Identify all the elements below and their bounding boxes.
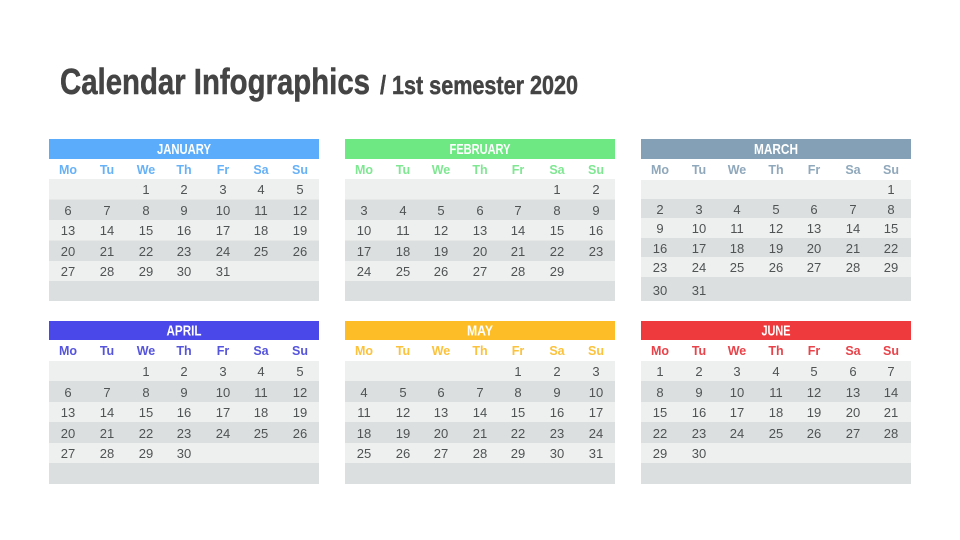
panel: January calendar [49, 139, 319, 301]
date rows: January: 26 [293, 244, 307, 259]
date rows: May: 19 [396, 426, 410, 441]
date rows: April: 9 [180, 385, 188, 400]
date rows: June [641, 361, 911, 484]
date rows: May: 7 [476, 385, 484, 400]
date rows: March: 30 [653, 283, 667, 298]
date rows: June: 25 [769, 426, 783, 441]
date rows: February: 2 [592, 182, 600, 197]
weekday labels: April: We [137, 344, 155, 358]
date rows: March: 29 [884, 260, 898, 275]
month header: March [641, 139, 911, 159]
weekday labels: January: We [137, 163, 155, 177]
weekday labels: March: Sa [845, 163, 862, 177]
date rows: February: 8 [553, 203, 561, 218]
weekday labels: March: Mo [651, 163, 669, 177]
weekday labels: January: Fr [217, 163, 229, 177]
date rows: June: 9 [695, 385, 703, 400]
date rows: March: 7 [849, 202, 857, 217]
weekday labels: April: Tu [100, 344, 114, 358]
date rows: January: 31 [216, 264, 230, 279]
date rows: January: 30 [177, 264, 191, 279]
date rows: February: 21 [511, 244, 525, 259]
date rows: January: 9 [180, 203, 188, 218]
weekday labels: June: Su [883, 344, 899, 358]
month header: May [345, 321, 615, 340]
date rows: March: 8 [887, 202, 895, 217]
date rows: April: 10 [216, 385, 230, 400]
date rows: March: 26 [769, 260, 783, 275]
date rows: January: 8 [142, 203, 150, 218]
date rows: January: 16 [177, 223, 191, 238]
weekday labels: April: Th [176, 344, 192, 358]
date rows: February: 20 [473, 244, 487, 259]
date rows: January: 6 [64, 203, 72, 218]
date rows: February: 3 [360, 203, 368, 218]
date rows: April: 28 [100, 446, 114, 461]
date rows: May: 23 [550, 426, 564, 441]
date rows: June: 23 [692, 426, 706, 441]
date rows: March: 6 [810, 202, 818, 217]
date rows: May: 12 [396, 405, 410, 420]
date rows: March: 10 [692, 221, 706, 236]
date rows: May: 5 [399, 385, 407, 400]
date rows: January: 21 [100, 244, 114, 259]
date rows: April: 26 [293, 426, 307, 441]
date rows: April: 29 [139, 446, 153, 461]
date rows: May: 20 [434, 426, 448, 441]
date rows: June: 14 [884, 385, 898, 400]
date rows: January: 10 [216, 203, 230, 218]
date rows: June: 30 [692, 446, 706, 461]
date rows: February: 13 [473, 223, 487, 238]
date rows: March: 21 [846, 241, 860, 256]
date rows: June: 11 [769, 385, 783, 400]
date rows: January: 20 [61, 244, 75, 259]
date rows: February: 17 [357, 244, 371, 259]
weekday labels: January: Mo [59, 163, 77, 177]
date rows: January: 11 [254, 203, 268, 218]
panel: March calendar [641, 139, 911, 301]
date rows: January: 12 [293, 203, 307, 218]
date rows: June: 28 [884, 426, 898, 441]
date rows: June: 10 [730, 385, 744, 400]
date rows: April: 4 [257, 364, 265, 379]
weekday labels: January: Th [176, 163, 192, 177]
month header: April [49, 321, 319, 340]
date rows: January: 13 [61, 223, 75, 238]
date rows: April: 16 [177, 405, 191, 420]
weekday labels: May: We [432, 344, 450, 358]
weekday labels: April: Sa [253, 344, 270, 358]
date rows: May: 27 [434, 446, 448, 461]
date rows: February: 15 [550, 223, 564, 238]
weekday labels: May: Fr [512, 344, 524, 358]
date rows: February: 9 [592, 203, 600, 218]
weekday labels: March: Th [768, 163, 784, 177]
date rows: March: 5 [772, 202, 780, 217]
date rows: June: 21 [884, 405, 898, 420]
date rows: February: 11 [396, 223, 410, 238]
date rows: February: 7 [514, 203, 522, 218]
weekday labels: February: Tu [396, 163, 410, 177]
date rows: June: 18 [769, 405, 783, 420]
date rows: March: 22 [884, 241, 898, 256]
date rows: April: 6 [64, 385, 72, 400]
date rows: March: 1 [887, 182, 895, 197]
date rows: May: 1 [514, 364, 522, 379]
date rows: March: 9 [656, 221, 664, 236]
weekday labels: February [355, 163, 604, 177]
date rows: February: 26 [434, 264, 448, 279]
weekday labels: February: We [432, 163, 450, 177]
date rows: April: 17 [216, 405, 230, 420]
weekday labels: March: Tu [692, 163, 706, 177]
date rows: February: 6 [476, 203, 484, 218]
date rows: March: 15 [884, 221, 898, 236]
date rows: March: 12 [769, 221, 783, 236]
date rows: June: 6 [849, 364, 857, 379]
month header: January: JANUARY [157, 141, 211, 158]
date rows: June: 19 [807, 405, 821, 420]
date rows: January: 7 [103, 203, 111, 218]
date rows: January: 28 [100, 264, 114, 279]
date rows: May: 26 [396, 446, 410, 461]
date rows: March: 14 [846, 221, 860, 236]
date rows: February: 25 [396, 264, 410, 279]
date rows: June: 13 [846, 385, 860, 400]
date rows: May: 9 [553, 385, 561, 400]
date rows: January: 4 [257, 182, 265, 197]
date rows: April: 12 [293, 385, 307, 400]
subtitle: / 1st semester 2020 [380, 70, 578, 100]
date rows: June: 3 [733, 364, 741, 379]
date rows: March: 11 [730, 221, 744, 236]
date rows: January: 15 [139, 223, 153, 238]
weekday labels: April [59, 344, 308, 358]
date rows: April: 14 [100, 405, 114, 420]
weekday labels: February: Sa [549, 163, 566, 177]
date rows: June: 22 [653, 426, 667, 441]
date rows: June: 8 [656, 385, 664, 400]
date rows: May: 21 [473, 426, 487, 441]
date rows: February: 29 [550, 264, 564, 279]
date rows: January: 24 [216, 244, 230, 259]
date rows: February: 24 [357, 264, 371, 279]
panel: May calendar [345, 321, 615, 484]
date rows: February: 5 [437, 203, 445, 218]
date rows: May: 13 [434, 405, 448, 420]
date rows: May: 30 [550, 446, 564, 461]
weekday labels: March: Su [883, 163, 899, 177]
date rows: April: 30 [177, 446, 191, 461]
date rows: June: 7 [887, 364, 895, 379]
weekday labels: May: Sa [549, 344, 566, 358]
date rows: February: 22 [550, 244, 564, 259]
date rows: January: 18 [254, 223, 268, 238]
date rows: May: 29 [511, 446, 525, 461]
date rows: January: 1 [142, 182, 150, 197]
title: Calendar Infographics [60, 61, 370, 102]
date rows: March: 3 [695, 202, 703, 217]
month header: April: APRIL [166, 322, 202, 340]
date rows: April: 22 [139, 426, 153, 441]
date rows: May: 31 [589, 446, 603, 461]
date rows: May: 11 [357, 405, 371, 420]
date rows: January: 3 [219, 182, 227, 197]
weekday labels: April: Mo [59, 344, 77, 358]
date rows: June: 29 [653, 446, 667, 461]
date rows: April: 13 [61, 405, 75, 420]
date rows: March: 16 [653, 241, 667, 256]
date rows: March: 27 [807, 260, 821, 275]
weekday labels: May: Su [588, 344, 604, 358]
weekday labels: January: Tu [100, 163, 114, 177]
weekday labels: March [651, 163, 899, 177]
date rows: May: 4 [360, 385, 368, 400]
date rows: January: 14 [100, 223, 114, 238]
date rows: April: 5 [296, 364, 304, 379]
date rows: April: 15 [139, 405, 153, 420]
date rows: April: 7 [103, 385, 111, 400]
weekday labels: May: Tu [396, 344, 410, 358]
date rows: March: 28 [846, 260, 860, 275]
date rows: May: 25 [357, 446, 371, 461]
weekday labels: February: Fr [512, 163, 524, 177]
date rows: February: 4 [399, 203, 407, 218]
date rows: March: 20 [807, 241, 821, 256]
weekday labels: May [355, 344, 604, 358]
date rows: April: 2 [180, 364, 188, 379]
date rows: January: 27 [61, 264, 75, 279]
date rows: February: 12 [434, 223, 448, 238]
weekday labels: January: Su [292, 163, 308, 177]
month header: June: JUNE [762, 322, 790, 340]
date rows: April: 27 [61, 446, 75, 461]
date rows: January: 17 [216, 223, 230, 238]
weekday labels: June: Mo [651, 344, 669, 358]
date rows: May: 16 [550, 405, 564, 420]
date rows: January: 5 [296, 182, 304, 197]
weekday labels: April: Su [292, 344, 308, 358]
weekday labels: May: Mo [355, 344, 373, 358]
date rows: April: 18 [254, 405, 268, 420]
date rows: January: 22 [139, 244, 153, 259]
date rows: February: 23 [589, 244, 603, 259]
date rows: April: 11 [254, 385, 268, 400]
date rows: February: 27 [473, 264, 487, 279]
date rows: April: 25 [254, 426, 268, 441]
month header: January [49, 139, 319, 159]
weekday labels: June [651, 344, 899, 358]
date rows: April: 8 [142, 385, 150, 400]
date rows: June: 15 [653, 405, 667, 420]
date rows: January: 2 [180, 182, 188, 197]
date rows: May: 2 [553, 364, 561, 379]
date rows: March: 13 [807, 221, 821, 236]
date rows: February: 10 [357, 223, 371, 238]
date rows: March: 25 [730, 260, 744, 275]
date rows: June: 2 [695, 364, 703, 379]
month header: February [345, 139, 615, 159]
weekday labels: June: Fr [808, 344, 820, 358]
date rows: April: 21 [100, 426, 114, 441]
date rows: April: 3 [219, 364, 227, 379]
date rows: May: 17 [589, 405, 603, 420]
date rows: June: 27 [846, 426, 860, 441]
date rows: February: 14 [511, 223, 525, 238]
date rows: June: 16 [692, 405, 706, 420]
date rows: June: 20 [846, 405, 860, 420]
date rows: January: 25 [254, 244, 268, 259]
weekday labels: June: Th [768, 344, 784, 358]
date rows: May: 10 [589, 385, 603, 400]
date rows: February: 19 [434, 244, 448, 259]
panel: February calendar [345, 139, 615, 301]
date rows: March: 2 [656, 202, 664, 217]
date rows: June: 26 [807, 426, 821, 441]
date rows: February: 18 [396, 244, 410, 259]
date rows: June: 12 [807, 385, 821, 400]
month header: May: MAY [467, 322, 493, 340]
weekday labels: May: Th [472, 344, 488, 358]
weekday labels: June: Tu [692, 344, 706, 358]
weekday labels: February: Mo [355, 163, 373, 177]
date rows: February: 16 [589, 223, 603, 238]
weekday labels: January [59, 163, 308, 177]
date rows: January: 29 [139, 264, 153, 279]
weekday labels: January: Sa [253, 163, 270, 177]
date rows: May: 15 [511, 405, 525, 420]
date rows: May: 14 [473, 405, 487, 420]
date rows: April: 24 [216, 426, 230, 441]
date rows: May [345, 361, 615, 484]
date rows: June: 5 [810, 364, 818, 379]
date rows: June: 24 [730, 426, 744, 441]
date rows: March: 17 [692, 241, 706, 256]
date rows: June: 17 [730, 405, 744, 420]
date rows: April: 1 [142, 364, 150, 379]
date rows: March: 4 [733, 202, 741, 217]
month header: June [641, 321, 911, 340]
date rows: March: 19 [769, 241, 783, 256]
panel: April calendar [49, 321, 319, 484]
date rows: May: 6 [437, 385, 445, 400]
date rows: January [49, 179, 319, 301]
weekday labels: April: Fr [217, 344, 229, 358]
weekday labels: June: Sa [845, 344, 862, 358]
month header: March: MARCH [754, 141, 798, 158]
weekday labels: March: We [728, 163, 746, 177]
weekday labels: February: Su [588, 163, 604, 177]
date rows: June: 4 [772, 364, 780, 379]
date rows: April: 19 [293, 405, 307, 420]
date rows: March: 18 [730, 241, 744, 256]
date rows: May: 22 [511, 426, 525, 441]
date rows: March: 24 [692, 260, 706, 275]
date rows: May: 18 [357, 426, 371, 441]
date rows: January: 19 [293, 223, 307, 238]
date rows: May: 3 [592, 364, 600, 379]
date rows: April [49, 361, 319, 484]
date rows: April: 23 [177, 426, 191, 441]
date rows: May: 28 [473, 446, 487, 461]
date rows: March: 23 [653, 260, 667, 275]
weekday labels: March: Fr [808, 163, 820, 177]
date rows: January: 23 [177, 244, 191, 259]
date rows: March [641, 180, 911, 301]
date rows: May: 8 [514, 385, 522, 400]
date rows: April: 20 [61, 426, 75, 441]
panel: June calendar [641, 321, 911, 484]
date rows: February: 28 [511, 264, 525, 279]
weekday labels: February: Th [472, 163, 488, 177]
date rows: May: 24 [589, 426, 603, 441]
date rows: March: 31 [692, 283, 706, 298]
weekday labels: June: We [728, 344, 746, 358]
date rows: February: 1 [553, 182, 561, 197]
month header: February: FEBRUARY [450, 141, 510, 158]
date rows: February [345, 179, 615, 301]
date rows: June: 1 [656, 364, 664, 379]
